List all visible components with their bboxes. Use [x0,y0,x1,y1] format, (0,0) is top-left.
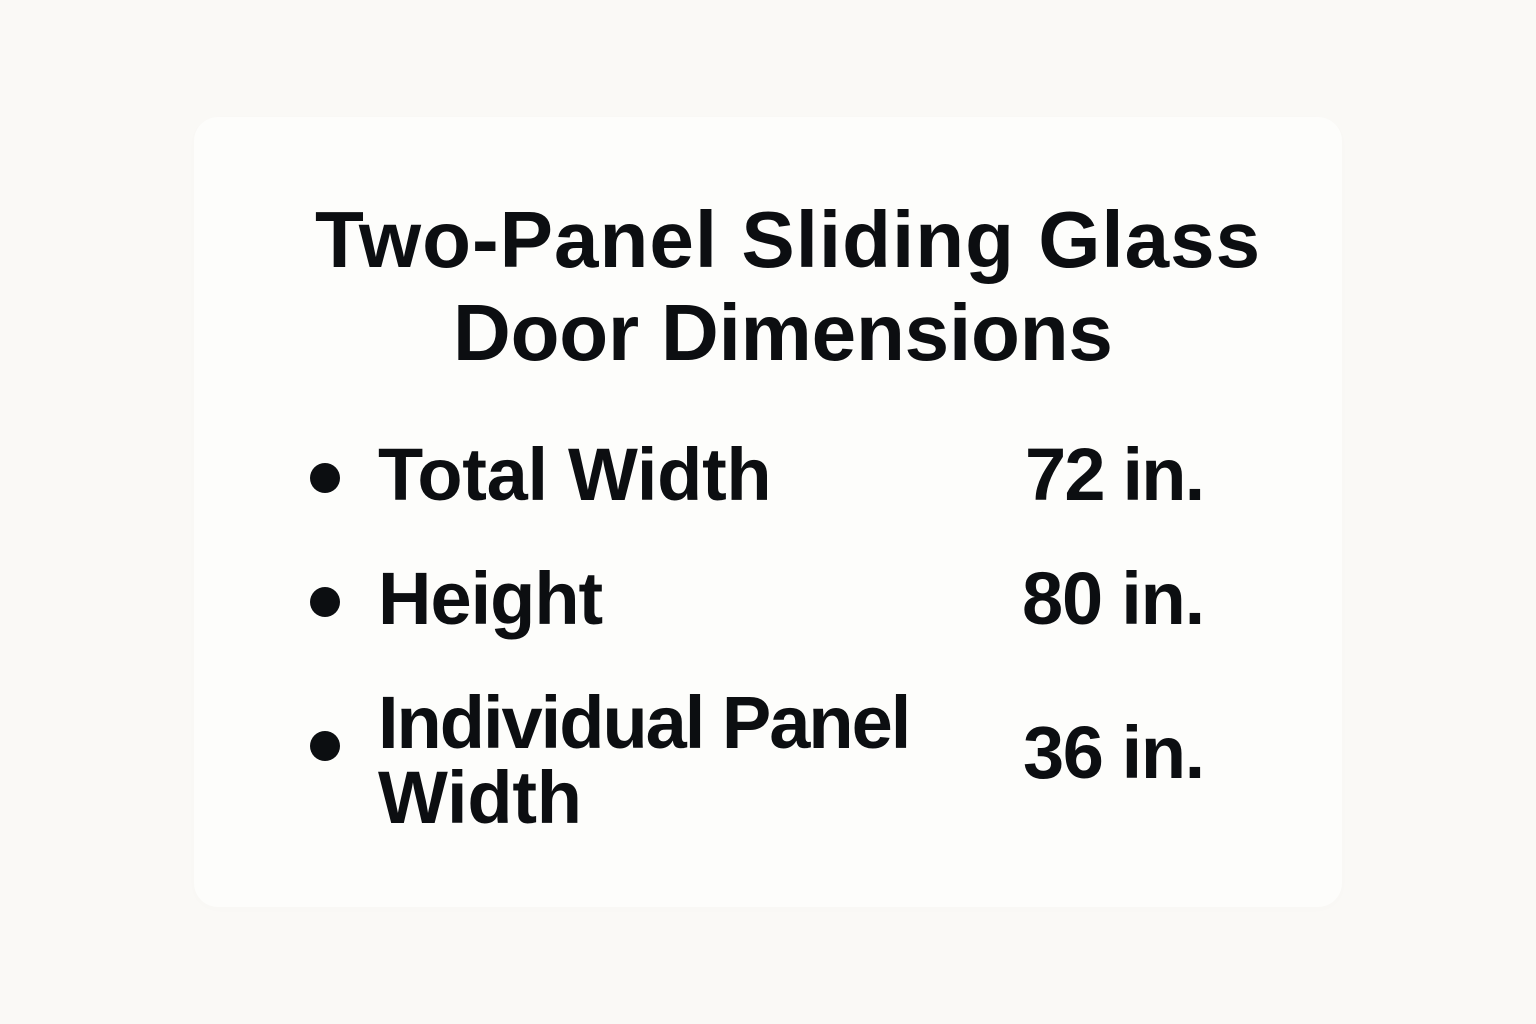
row: height: 80 in. [1022,557,1204,640]
row: individual panel width: 36 in. [1023,711,1204,794]
title [315,195,1261,377]
row: total width: Total Width [378,433,771,516]
row: individual panel width [310,681,1204,839]
title: Door Dimensions [453,288,1113,377]
panel: card [194,117,1342,907]
row: height: Height [378,557,602,640]
row: total width [310,433,1203,516]
row: individual panel width: Individual Panel [378,681,909,764]
row: total width: 72 in. [1025,433,1203,516]
row: height [310,557,1204,640]
title: Two-Panel Sliding Glass [315,195,1261,284]
row: individual panel width: Width [378,756,582,839]
